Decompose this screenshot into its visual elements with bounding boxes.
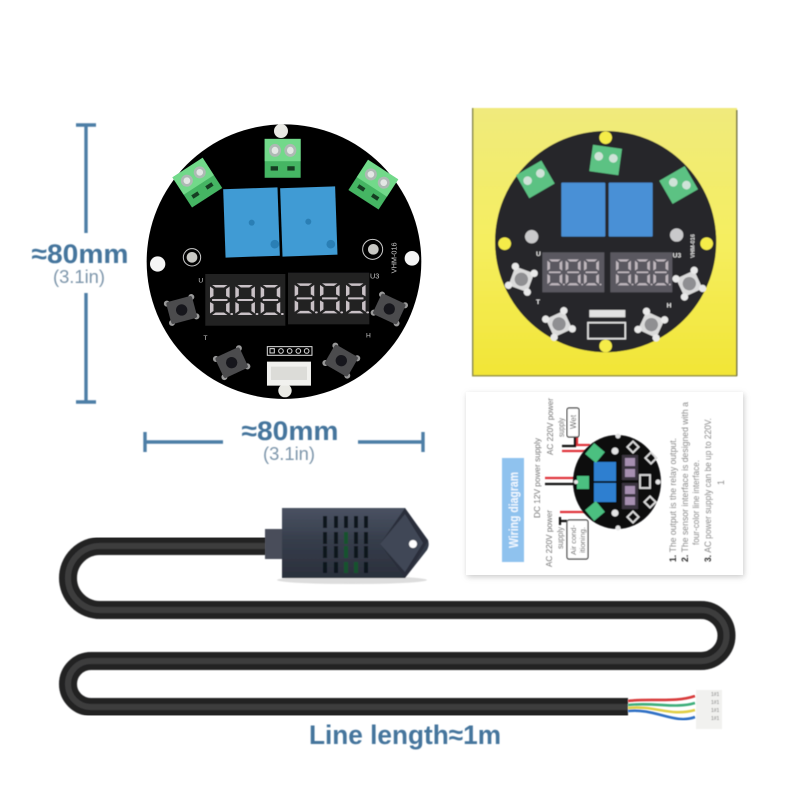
board silk labels: U3	[370, 271, 379, 280]
printed labels: VHM-016	[690, 234, 696, 258]
wet load box	[567, 408, 579, 437]
printed connector	[588, 310, 625, 339]
packaged yellow card	[472, 108, 738, 376]
air conditioning load box	[567, 520, 588, 559]
horizontal dimension	[145, 416, 423, 452]
printed labels	[536, 234, 696, 309]
wiring diagram heading: Wiring diagram	[507, 472, 521, 548]
vertical dimension	[32, 125, 128, 402]
horizontal dimension value: ≈80mm	[242, 416, 338, 446]
printed displays	[542, 252, 672, 292]
printed labels: H	[667, 302, 672, 309]
printed board graphic	[495, 131, 716, 352]
wiring labels: supply	[557, 418, 566, 437]
cable end connector: 1#1	[711, 716, 720, 722]
sensor probe	[265, 508, 429, 584]
vents	[323, 516, 368, 573]
cable end connector: 1#1	[711, 700, 720, 706]
board silk labels: H	[366, 332, 371, 339]
numbered notes: 2. The sensor interface is designed with a	[680, 402, 690, 562]
circuit board photo	[147, 124, 421, 399]
board silk labels: U	[198, 278, 203, 285]
strain relief	[265, 529, 282, 559]
wires	[545, 437, 590, 525]
button: top right	[370, 291, 409, 327]
right terminal block	[348, 160, 398, 210]
left display	[205, 274, 285, 326]
button: bottom left	[212, 344, 251, 381]
air conditioning load box: Air cond-	[569, 524, 578, 555]
coloured wires	[628, 696, 695, 719]
sensor housing	[282, 508, 429, 578]
wet load box: Wet	[569, 414, 578, 429]
printed LEDs	[525, 228, 683, 243]
numbered notes: 1	[716, 480, 726, 485]
pin header	[267, 347, 312, 355]
left sensor LED	[183, 249, 201, 266]
button: top left	[163, 293, 200, 327]
white sensor connector	[267, 362, 311, 386]
right relay	[280, 186, 337, 257]
wiring labels: DC 12V power supply	[533, 438, 542, 518]
printed labels: T	[536, 299, 540, 306]
mini board diagram	[573, 434, 661, 530]
board silk labels	[198, 242, 399, 342]
top terminal block	[265, 139, 301, 178]
board silk labels: VHM-016	[390, 242, 399, 273]
numbered notes	[668, 402, 726, 562]
vertical dimension inches: (3.1in)	[53, 267, 105, 287]
left terminal block	[172, 158, 222, 208]
mounting hole	[409, 540, 417, 548]
cable end connector	[696, 690, 722, 729]
wiring diagram heading	[502, 458, 524, 562]
instruction leaflet	[466, 392, 744, 577]
wiring labels: supply	[556, 527, 565, 549]
numbered notes: 3. AC power supply can be up to 220V.	[703, 418, 713, 562]
right display	[288, 273, 369, 324]
printed labels: U	[536, 251, 541, 258]
board silk labels: T	[203, 335, 207, 342]
cable length caption: Line length≈1m	[309, 720, 501, 750]
air conditioning load box: itioning.	[578, 527, 587, 553]
right sensor LED	[363, 239, 383, 259]
cable end connector: 1#1	[711, 708, 720, 714]
wiring labels	[533, 398, 566, 567]
numbered notes: four-color line interface.	[691, 460, 701, 545]
horizontal dimension inches: (3.1in)	[263, 444, 315, 464]
left relay	[223, 187, 280, 258]
printed labels: U3	[673, 253, 681, 260]
wiring labels: AC 220V power	[546, 398, 555, 455]
numbered notes: 1. The output is the relay output.	[668, 438, 678, 562]
cable	[68, 546, 726, 707]
printed terminals	[516, 145, 698, 204]
button: bottom right	[321, 342, 361, 380]
printed buttons	[504, 262, 707, 343]
cable end connector: 1#1	[711, 692, 720, 698]
wiring labels: AC 220V power	[545, 510, 554, 567]
printed relays	[561, 183, 653, 237]
vertical dimension value: ≈80mm	[32, 239, 128, 269]
